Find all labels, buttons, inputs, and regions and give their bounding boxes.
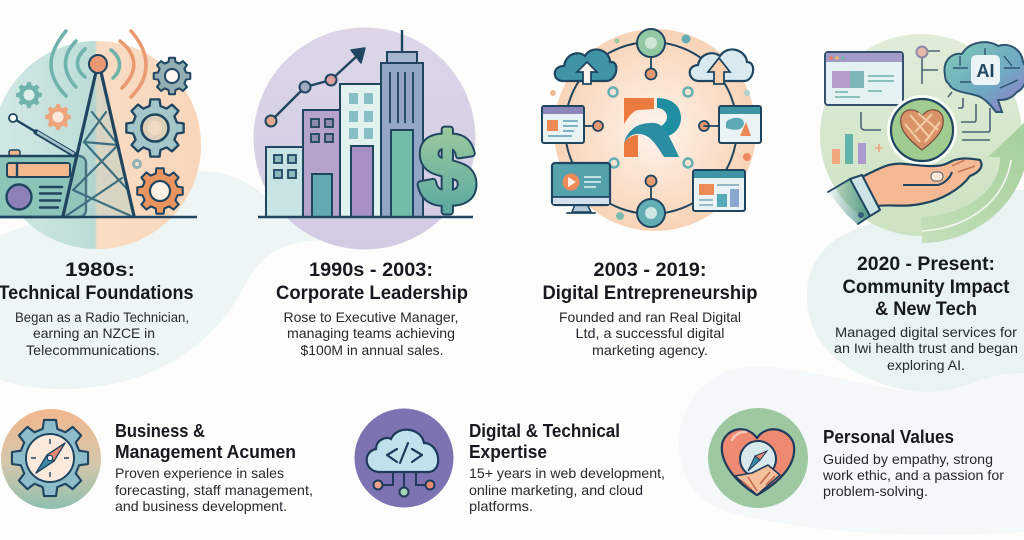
- skill icon: compass gear: [1, 409, 101, 509]
- skill icon: heart handshake: [708, 408, 808, 508]
- subheading: Technical Foundations: [0, 282, 194, 304]
- cuff and sleeve: [828, 175, 880, 225]
- gear: teal: [126, 99, 184, 157]
- building 2: [303, 110, 340, 217]
- skill text: business: Management Acumen: [115, 441, 296, 462]
- circuit connectors: [861, 51, 990, 140]
- panel: 2020 illustration: [820, 34, 1024, 243]
- description: managing teams achieving: [287, 325, 455, 341]
- heading: Digital & Technical: [469, 420, 620, 441]
- background wave: lower right: [679, 367, 1024, 535]
- subheading: Digital Entrepreneurship: [542, 282, 758, 304]
- building 1: [266, 147, 303, 217]
- dollar sign: $: [419, 114, 475, 226]
- dollar sign: $: [419, 114, 475, 226]
- skill text: personal values: [822, 426, 1004, 499]
- skill icon: code cloud: [354, 408, 454, 508]
- skill text: personal values: work ethic, and a passion for: [822, 467, 1004, 483]
- description: an Iwi health trust and began: [834, 340, 1018, 356]
- description: Began as a Radio Technician,: [15, 309, 189, 325]
- backdrop circle: [820, 34, 1022, 236]
- AI chip: [971, 55, 1000, 85]
- connector node: [916, 46, 928, 58]
- signal waves: [51, 31, 146, 97]
- radio: [0, 114, 86, 217]
- panel: 1990s illustration: [254, 28, 476, 250]
- description: [834, 324, 1018, 373]
- skill text: digital: [469, 420, 665, 514]
- timeline block: 2020-present: [834, 253, 1018, 373]
- hand: [862, 158, 982, 206]
- skill text: business: forecasting, staff management,: [115, 482, 313, 498]
- description: Founded and ran Real Digital: [559, 309, 741, 325]
- radio tower: [63, 55, 134, 216]
- skill text: personal values: problem-solving.: [823, 483, 928, 499]
- description: Telecommunications.: [26, 342, 160, 358]
- description: marketing agency.: [592, 342, 708, 358]
- AI label: AI: [976, 61, 994, 81]
- description: Ltd, a successful digital: [576, 325, 724, 341]
- timeline block: 2003-2019: [542, 259, 758, 358]
- skill text: digital: online marketing, and cloud: [469, 482, 643, 498]
- skill text: digital: platforms.: [469, 498, 533, 514]
- description: [559, 309, 741, 358]
- description: Guided by empathy, strong: [823, 451, 993, 467]
- heading: 2003 - 2019:: [594, 259, 706, 281]
- heading: 1990s - 2003:: [309, 259, 433, 281]
- background wave: right: [807, 190, 1024, 392]
- heading: 1980s:: [65, 259, 135, 281]
- description: $100M in annual sales.: [300, 342, 444, 358]
- subheading: Corporate Leadership: [276, 282, 468, 304]
- description: 15+ years in web development,: [469, 465, 665, 481]
- browser window: [825, 52, 903, 105]
- ring nodes: [550, 29, 751, 227]
- timeline block: 1980s: [0, 259, 194, 358]
- logo R: [624, 98, 681, 157]
- subheading: Community Impact: [842, 276, 1010, 298]
- brain with AI chip: [944, 42, 1024, 112]
- skill text: digital: Expertise: [469, 441, 547, 462]
- description: earning an NZCE in: [33, 325, 155, 341]
- background wave: left: [0, 171, 330, 389]
- skill text: business: [115, 420, 313, 514]
- backdrop circle: [554, 29, 756, 231]
- description: exploring AI.: [887, 357, 965, 373]
- timeline block: 2020-present: & New Tech: [875, 298, 977, 320]
- bar chart: [832, 134, 883, 164]
- gear: grey: [154, 58, 190, 94]
- description: [15, 309, 189, 358]
- description: Rose to Executive Manager,: [284, 309, 458, 325]
- arrow highlight: [922, 160, 1011, 231]
- window right: [704, 106, 761, 143]
- building 4: [381, 30, 423, 217]
- small gears: [16, 82, 141, 168]
- cloud upload left: [555, 49, 616, 84]
- backdrop circle: [254, 28, 476, 250]
- building 3: [340, 84, 381, 217]
- panel: 2003 illustration: [542, 29, 761, 231]
- window left: [542, 106, 590, 143]
- sweeping arrow: [922, 123, 1024, 243]
- heading: Business &: [115, 420, 205, 441]
- ground line: [0, 216, 197, 218]
- network ring: [565, 42, 737, 214]
- window bottom right: [693, 170, 745, 211]
- description: [284, 309, 458, 358]
- heading: 2020 - Present:: [857, 253, 995, 275]
- description: Managed digital services for: [835, 324, 1017, 340]
- heading: Personal Values: [823, 426, 954, 447]
- ground line: [258, 216, 473, 218]
- skill text: business: and business development.: [115, 498, 287, 514]
- cloud upload right: [690, 49, 753, 84]
- backdrop circle: [0, 41, 201, 249]
- gear: orange: [137, 168, 183, 214]
- panel: 1980s illustration: [0, 31, 201, 249]
- trend line arrow: [266, 48, 365, 126]
- heart emblem: [887, 95, 957, 165]
- monitor: [552, 163, 610, 213]
- timeline block: 1990s: [276, 259, 468, 358]
- description: Proven experience in sales: [115, 465, 284, 481]
